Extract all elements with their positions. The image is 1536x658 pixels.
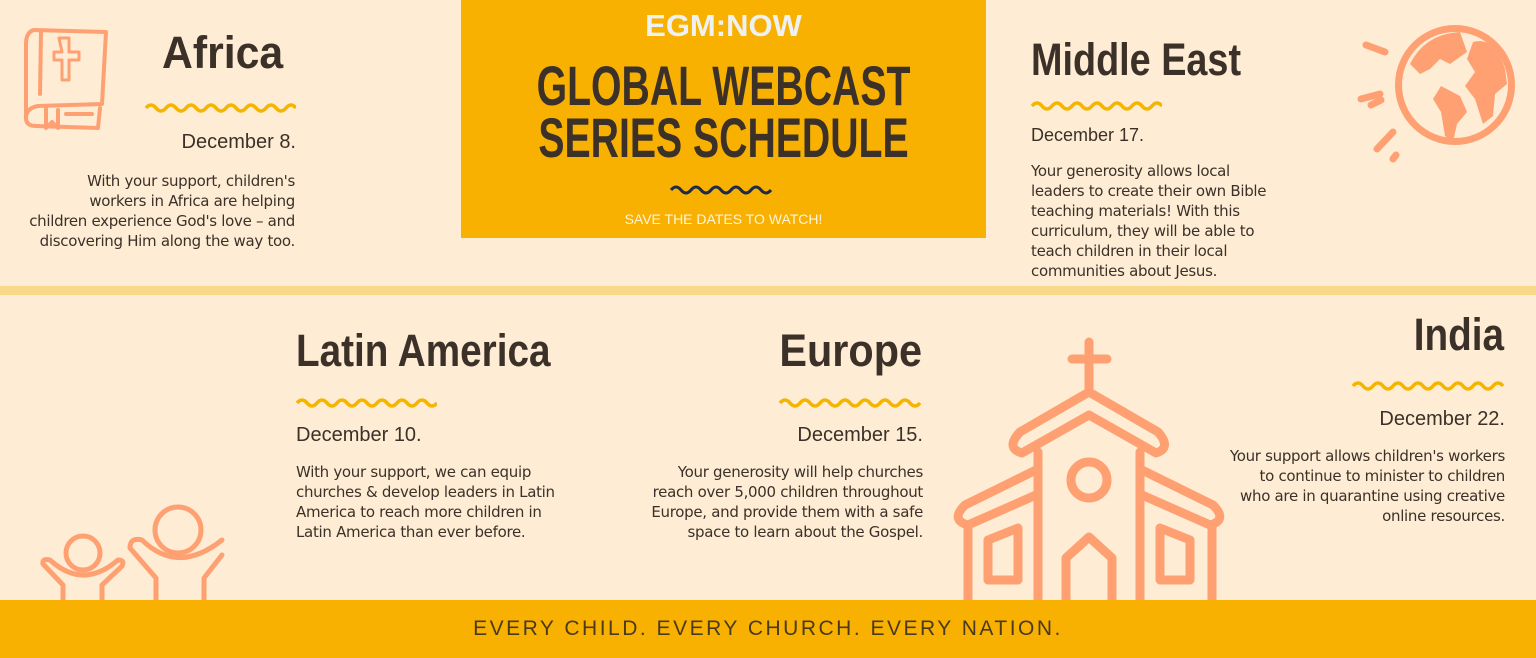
- date: India: December 22.: [1379, 408, 1505, 430]
- heading: Middle East: Middle East: [1031, 34, 1241, 85]
- text: Middle East: teaching materials! With this: [1031, 202, 1240, 220]
- icon: globe: [1358, 25, 1515, 162]
- text: India: online resources.: [1382, 507, 1505, 525]
- text: Middle East: [1031, 162, 1266, 280]
- panel: header box: [461, 0, 986, 238]
- title: [537, 54, 910, 169]
- heading: EGM:NOW: EGM:NOW: [645, 8, 802, 43]
- text: Middle East: curriculum, they will be able to: [1031, 222, 1254, 240]
- wave: Europe: [778, 398, 922, 408]
- wave: Africa: [144, 103, 296, 113]
- text: Latin America: America to reach more children in: [296, 503, 542, 521]
- icon: bible: [24, 28, 108, 130]
- text: Latin America: [296, 463, 555, 541]
- heading: India: India: [1414, 309, 1504, 360]
- text: Africa: workers in Africa are helping: [89, 192, 295, 210]
- text: India: Your support allows children's workers: [1230, 447, 1505, 465]
- title: SERIES SCHEDULE: [538, 106, 909, 169]
- date: Middle East: December 17.: [1031, 125, 1144, 145]
- text: Europe: Europe, and provide them with a safe: [651, 503, 923, 521]
- text: India: who are in quarantine using creative: [1240, 487, 1505, 505]
- footer text: EVERY CHILD. EVERY CHURCH. EVERY NATION.: [473, 617, 1063, 640]
- text: Africa: children experience God's love – and: [29, 212, 295, 230]
- wave: header: [670, 186, 772, 194]
- text: Middle East: leaders to create their own Bible: [1031, 182, 1266, 200]
- date: Latin America: December 10.: [296, 424, 422, 446]
- icon: church: [954, 338, 1224, 600]
- text: Africa: [29, 172, 295, 250]
- text: Latin America: With your support, we can equip: [296, 463, 531, 481]
- text: Middle East: Your generosity allows local: [1031, 162, 1230, 180]
- text: India: to continue to minister to children: [1260, 467, 1505, 485]
- wave: Middle East: [1030, 101, 1162, 111]
- text: Europe: Your generosity will help churches: [678, 463, 923, 481]
- title: GLOBAL WEBCAST: [537, 54, 910, 117]
- text: Europe: reach over 5,000 children throughout: [653, 483, 923, 501]
- subtitle: SAVE THE DATES TO WATCH!: [625, 211, 822, 227]
- text: Europe: space to learn about the Gospel.: [688, 523, 923, 541]
- date: Africa: December 8.: [182, 131, 296, 153]
- text: Latin America: churches & develop leaders in Latin: [296, 483, 555, 501]
- footer: [0, 600, 1536, 658]
- text: Africa: With your support, children's: [87, 172, 295, 190]
- heading: Europe: Europe: [779, 325, 922, 376]
- heading: Africa: Africa: [162, 27, 283, 78]
- text: Africa: discovering Him along the way too.: [40, 232, 295, 250]
- text: Latin America: Latin America than ever before.: [296, 523, 525, 541]
- text: Europe: [651, 463, 923, 541]
- icon: children: [40, 504, 224, 600]
- wave: Latin America: [296, 398, 437, 408]
- wave: India: [1352, 381, 1504, 391]
- text: Middle East: communities about Jesus.: [1031, 262, 1217, 280]
- date: Europe: December 15.: [797, 424, 923, 446]
- text: Middle East: teach children in their local: [1031, 242, 1227, 260]
- heading: Latin America: Latin America: [296, 325, 551, 376]
- divider: [0, 286, 1536, 295]
- text: India: [1230, 447, 1505, 525]
